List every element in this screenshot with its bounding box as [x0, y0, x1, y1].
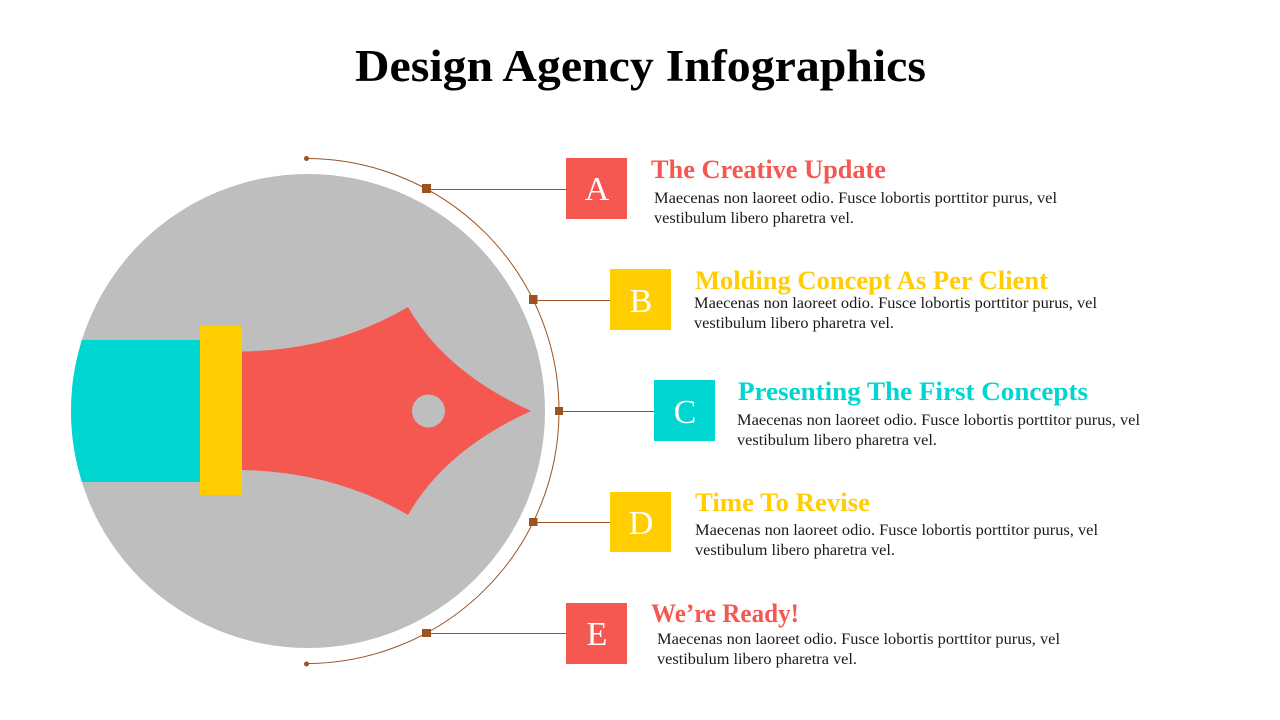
item A: A	[585, 171, 610, 208]
pen barrel	[60, 340, 200, 482]
item E	[566, 598, 1060, 668]
item A: vestibulum libero pharetra vel.	[654, 210, 854, 227]
item A: Maecenas non laoreet odio. Fusce lobortis porttitor purus, vel	[654, 190, 1057, 207]
item A: The Creative Update	[651, 154, 886, 184]
item D: vestibulum libero pharetra vel.	[695, 542, 895, 559]
item B: Maecenas non laoreet odio. Fusce lobortis porttitor purus, vel	[694, 295, 1097, 312]
item D: D	[629, 505, 653, 542]
item B	[610, 265, 1097, 332]
title: Design Agency Infographics	[355, 41, 926, 91]
grey circle	[71, 174, 545, 648]
item D: Maecenas non laoreet odio. Fusce lobortis porttitor purus, vel	[695, 522, 1098, 539]
nib hole	[412, 394, 445, 428]
item D	[610, 487, 1098, 559]
outer arc with connector markers	[304, 156, 655, 666]
item C: Presenting The First Concepts	[738, 376, 1088, 406]
item C	[654, 376, 1140, 449]
item E: We’re Ready!	[651, 598, 799, 628]
item C: C	[674, 394, 696, 431]
pen nib	[242, 307, 531, 515]
item C: Maecenas non laoreet odio. Fusce lobortis porttitor purus, vel	[737, 412, 1140, 429]
item E: vestibulum libero pharetra vel.	[657, 651, 857, 668]
item D: Time To Revise	[695, 487, 870, 517]
pen collar	[200, 326, 242, 495]
item C: vestibulum libero pharetra vel.	[737, 432, 937, 449]
item E: E	[587, 616, 607, 653]
item B: B	[630, 283, 652, 320]
item A	[566, 154, 1057, 227]
item E: Maecenas non laoreet odio. Fusce lobortis porttitor purus, vel	[657, 631, 1060, 648]
item B: Molding Concept As Per Client	[695, 265, 1048, 295]
pen illustration	[60, 174, 545, 648]
item B: vestibulum libero pharetra vel.	[694, 315, 894, 332]
